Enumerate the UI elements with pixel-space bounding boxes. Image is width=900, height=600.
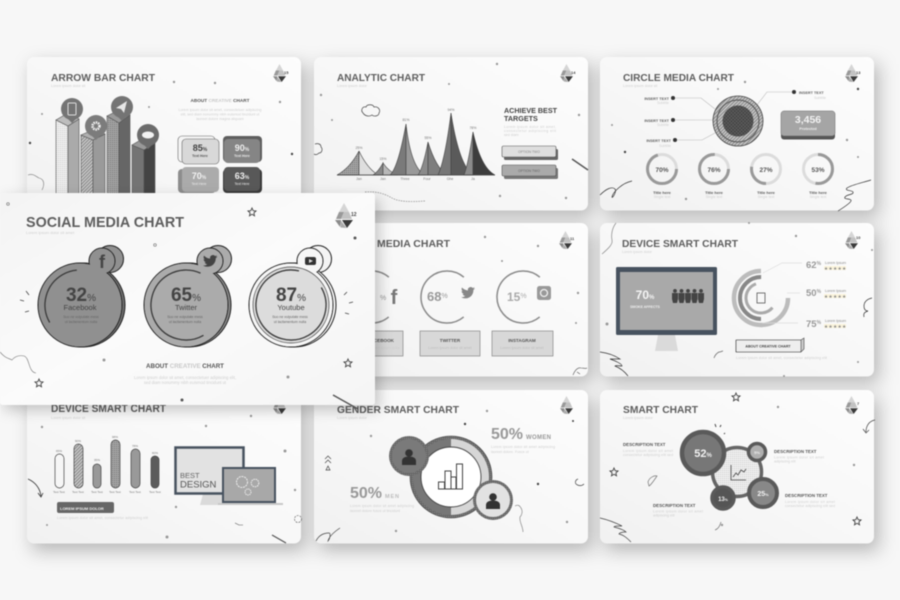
heading: device smart chart: DEVICE SMART CHART <box>51 403 166 415</box>
body text: sed diam <box>504 133 519 137</box>
donut: 76 <box>700 154 728 199</box>
peak labels: Ghe <box>447 177 453 181</box>
heading: media chart: MEDIA CHART <box>377 238 451 250</box>
donut: 53 <box>804 154 832 199</box>
panel: circle media chart <box>600 57 874 211</box>
specks <box>320 63 580 199</box>
label dots and text <box>644 90 826 148</box>
monitor stat: 70% <box>636 288 655 302</box>
panel: device smart chart top <box>600 222 874 377</box>
logo <box>845 396 860 414</box>
specks <box>370 410 574 532</box>
label dots and text: Subtitle <box>659 144 671 148</box>
spark marks <box>20 291 353 314</box>
stat box: 3,456: 3,456 <box>795 114 821 126</box>
specks <box>606 222 873 377</box>
doodles <box>600 420 875 542</box>
bubble 52: 52% <box>694 448 712 460</box>
specks <box>611 81 859 200</box>
stat box 85 <box>178 136 219 164</box>
bubble 13: 13% <box>718 497 729 503</box>
description: upper left <box>623 442 673 457</box>
chart: facebook 32 percent <box>32 246 128 353</box>
stat box 63 <box>223 167 262 193</box>
stat: women <box>491 426 555 454</box>
scribbles <box>600 180 871 211</box>
doughnut ring <box>410 436 492 518</box>
pill bar chart <box>55 440 159 488</box>
subtitle: Lorem ipsum dolor <box>337 84 368 88</box>
description: Suo ne vulputate mess <box>63 315 99 319</box>
panel: social media chart (front card) <box>0 193 375 409</box>
donut: 70: Single text <box>654 195 670 199</box>
card shadows <box>32 64 879 551</box>
stat box 90: Text Here <box>234 154 250 158</box>
panel: social media chart (behind) <box>314 223 588 376</box>
heading: gender smart chart: GENDER SMART CHART <box>337 404 460 416</box>
stat: men: MEN <box>385 494 399 500</box>
button: option two <box>502 146 558 160</box>
stat box: 3,456 <box>781 111 835 140</box>
description: lower right: Lorem ipsum dolor sit amet <box>785 500 835 504</box>
description: lower left: Lorem ipsum dolor sit amet <box>653 510 703 514</box>
panel: arrow bar chart <box>27 57 301 210</box>
label dots and text: Subtitle <box>814 96 826 100</box>
stat: men: laoreet dolore fusce ut tincidunt <box>350 509 400 513</box>
bar labels: Text Text <box>149 490 161 494</box>
specks <box>721 406 855 526</box>
ring: twitter: % <box>441 293 448 300</box>
dashed path doodle <box>365 192 425 202</box>
desktop monitor: BEST <box>180 471 200 480</box>
textured centre circle <box>713 96 763 146</box>
bubble 25: 25% <box>757 491 769 498</box>
stat box 90 <box>223 136 262 163</box>
about ribbon <box>736 338 804 352</box>
stat box 70 <box>178 167 219 193</box>
box: instagram: Lorem ipsum dolor sit amet <box>500 346 544 350</box>
label: Twitter <box>175 303 198 312</box>
desktop monitor <box>176 448 244 505</box>
stat box 70: Text Here <box>192 182 207 186</box>
box: facebook: FACEBOOK <box>368 338 395 343</box>
heading: smart chart: SMART CHART <box>623 404 699 416</box>
box: facebook: Lorem ipsum dolor <box>370 346 401 350</box>
connector lines <box>762 263 802 323</box>
donut: 27: Title here <box>757 190 776 195</box>
doodle <box>28 174 44 190</box>
icon: facebook: f <box>99 252 106 272</box>
doodle <box>573 368 587 375</box>
box: instagram: INSTAGRAM <box>508 338 536 343</box>
peak labels: 94% <box>447 108 455 112</box>
logo <box>273 396 286 414</box>
peak labels: 15% <box>379 157 387 161</box>
bar labels: 90% <box>75 439 81 443</box>
bar labels: Text Text <box>109 490 121 494</box>
icon: bar chart <box>438 464 462 489</box>
stat: men <box>350 485 414 513</box>
panel: device smart chart bottom <box>27 390 302 544</box>
stat rows: ★★★★★ <box>824 294 847 299</box>
subtitle: Lorem ipsum dolor <box>623 416 654 420</box>
laptop <box>218 468 283 505</box>
icon pins <box>61 96 159 149</box>
description <box>63 315 99 324</box>
donut: 70: Title here <box>653 190 672 195</box>
logo <box>560 64 576 82</box>
donut: 70: 70% <box>655 167 669 174</box>
peak labels: 25% <box>355 146 363 150</box>
stat: men: 50% <box>350 485 382 502</box>
icon: line chart <box>731 465 746 480</box>
value: 65% <box>171 285 201 306</box>
panel: smart chart <box>600 390 875 544</box>
stat box 63: Text Here <box>235 182 250 186</box>
logo <box>845 64 861 82</box>
stat: women: Lorem ipsum dolor sit amet adipiscing <box>491 445 555 449</box>
stars <box>610 393 861 525</box>
chart: twitter 65 percent <box>138 246 234 353</box>
description: upper right <box>774 449 824 464</box>
about text: Lorem ipsum dolor sit amet, consectetuer adipiscing elit, <box>134 375 236 380</box>
heading: device smart chart: DEVICE SMART CHART <box>622 238 739 250</box>
description: ut lacfamentum nulla <box>169 320 201 324</box>
about text: Lorem ipsum dolor sit amet, consectetuer adipiscing <box>179 108 261 112</box>
stat rows: ★★★★★ <box>824 266 847 271</box>
bubble small: 5% <box>754 450 760 455</box>
subtitle: Lorem ipsum dolor sit <box>51 84 85 88</box>
peak labels <box>355 108 477 181</box>
logo: 15 <box>284 70 289 75</box>
monitor <box>616 267 717 351</box>
concentric arc chart <box>734 271 788 325</box>
donut: 70 <box>648 154 676 199</box>
description: lower left <box>653 503 703 518</box>
ribbon caption: Lorem ipsum dolor sit amet, consectetur adipiscing elit <box>736 356 827 360</box>
peak labels: 78% <box>469 126 477 130</box>
ribbon caption: Lorem ipsum dolor sit amet, consectetur adipiscing elit <box>57 516 148 520</box>
description: lower right: consectetur adipiscing elit sed <box>785 504 835 508</box>
stat: women: WOMEN <box>526 435 551 441</box>
label dots and text: Subtitle <box>657 123 669 127</box>
logo: 14 <box>571 70 576 75</box>
ring: facebook: % <box>380 295 386 302</box>
button: option two dark: OPTION TWO <box>518 169 540 173</box>
subtitle: Lorem ipsum dolor <box>337 416 368 420</box>
donut: 27: Single text <box>758 195 774 199</box>
bar labels: 65% <box>56 449 62 453</box>
stat rows: % <box>817 320 822 326</box>
description: upper left: Lorem ipsum dolor sit amet <box>623 449 673 453</box>
doodles <box>316 456 584 541</box>
heading: achieve best targets: ACHIEVE BEST <box>504 106 558 115</box>
stat rows: 75 <box>806 319 817 330</box>
subtitle: Lorem ipsum dolor <box>622 250 653 254</box>
peak labels: Three <box>400 177 410 181</box>
label: Facebook <box>64 303 97 312</box>
label dots and text: Subtitle <box>657 101 669 105</box>
doodle: pen <box>333 395 358 409</box>
body text: consectetur adipiscing elit <box>504 129 556 133</box>
label dots and text: INSERT TEXT <box>799 91 824 95</box>
bar labels: Text Text <box>53 490 65 494</box>
description: upper left: consectetur adipiscing elit sed <box>623 453 673 457</box>
area peak chart <box>337 113 495 175</box>
stat rows: % <box>817 261 822 267</box>
ring: instagram: % <box>520 293 527 300</box>
peak labels: 81% <box>402 118 410 122</box>
icon: youtube <box>305 257 316 265</box>
specks <box>29 81 293 155</box>
peak labels: Jan <box>380 177 386 181</box>
value: 87% <box>276 285 306 306</box>
button: option two: OPTION TWO <box>518 150 540 154</box>
peak labels: Ja <box>471 177 475 181</box>
body text: Lorem ipsum dolor sit amet, <box>504 125 556 129</box>
ring: twitter <box>410 260 484 334</box>
description: ut lacfamentum nulla <box>65 320 97 324</box>
ribbon: LOREM IPSUM DOLOR <box>60 506 104 511</box>
description: lower right: DESCRIPTION TEXT <box>785 493 828 498</box>
panel: gender smart chart <box>314 390 588 544</box>
stat rows: Lorem Ipsum <box>825 261 846 265</box>
box: facebook <box>368 331 403 356</box>
logo <box>335 203 357 228</box>
about text: elit, sed diam nonummy nibh euismod tincidunt ut <box>181 112 259 116</box>
stat rows <box>806 260 847 330</box>
heading: circle media chart: CIRCLE MEDIA CHART <box>623 72 735 84</box>
value: 32% <box>66 285 96 306</box>
ring: instagram: 15 <box>507 290 520 304</box>
subtitle: Lorem ipsum dolor sit <box>623 84 657 88</box>
heading: social media chart: SOCIAL MEDIA CHART <box>26 214 184 231</box>
peak labels: 55% <box>424 136 432 140</box>
description: upper right: Lorem ipsum dolor sit amet <box>774 456 824 460</box>
about text <box>134 375 236 385</box>
label dots and text: INSERT TEXT <box>644 119 670 123</box>
label dots and text: INSERT TEXT <box>646 139 672 143</box>
doodle: curl <box>0 352 36 373</box>
logo: 11 <box>570 236 575 241</box>
arrow doodle <box>28 479 43 497</box>
logo: 13 <box>856 70 861 75</box>
logo <box>559 231 575 249</box>
ring: instagram <box>486 260 560 334</box>
box: twitter: TWITTER <box>440 338 461 343</box>
description: upper right: DESCRIPTION TEXT <box>774 449 817 454</box>
stat box: 3,456: Protected <box>799 127 817 131</box>
box: instagram <box>492 331 553 356</box>
description: lower left: DESCRIPTION TEXT <box>653 503 696 508</box>
description: lower left: adipiscing elit <box>653 514 675 518</box>
about heading: ABOUT CREATIVE CHART <box>190 98 250 103</box>
logo: 7 <box>857 401 860 406</box>
heading: achieve best targets <box>504 106 558 123</box>
bar labels <box>53 435 161 494</box>
bar labels: Text Text <box>91 490 103 494</box>
heading: achieve best targets: TARGETS <box>504 114 538 123</box>
ring: twitter: 68 <box>427 289 441 304</box>
bar labels: 78% <box>132 444 138 448</box>
about text <box>179 108 261 121</box>
ribbon <box>57 502 114 513</box>
people icons <box>672 289 704 303</box>
stat box 63: 63% <box>235 171 250 181</box>
stat box 85: Text Here <box>192 154 208 158</box>
stat box 70: 70% <box>192 171 207 181</box>
chart: youtube 87 percent <box>243 246 339 353</box>
bar labels: Text Text <box>72 490 84 494</box>
stat rows: 62 <box>806 260 817 271</box>
ring: facebook <box>335 260 409 334</box>
donut: 76: Single text <box>706 195 722 199</box>
icon: cloud doodle <box>314 105 380 155</box>
stat rows: 50 <box>806 288 817 299</box>
label: Youtube <box>277 303 305 312</box>
stat: women: laoreet dolore. Fusce ut <box>491 450 529 454</box>
box: twitter <box>420 331 480 356</box>
peak labels: Four <box>423 177 431 181</box>
logo: 10 <box>856 235 861 240</box>
logo: 12 <box>351 212 357 218</box>
scribbles <box>600 223 872 376</box>
donut: 27 <box>752 154 780 199</box>
description: lower right <box>785 493 835 508</box>
stat rows: % <box>817 289 822 295</box>
button: option two dark <box>502 165 558 179</box>
stat rows: Lorem Ipsum <box>825 289 846 293</box>
stat box 85: 85% <box>193 143 208 153</box>
monitor stat: SMOKE AFFECTS <box>630 305 661 309</box>
description <box>167 315 203 324</box>
donut: 27: 27% <box>759 167 773 174</box>
box: twitter: Lorem ipsum dolor sit amet <box>428 346 472 350</box>
connector lines <box>673 92 794 140</box>
subtitle: Lorem ipsum dolor sit <box>51 416 85 420</box>
heading: arrow bar chart: ARROW BAR CHART <box>51 72 156 84</box>
pen doodle <box>572 159 588 170</box>
panel: analytic chart <box>314 57 588 210</box>
person: woman <box>473 480 513 520</box>
label dots and text: INSERT TEXT <box>644 97 670 101</box>
description: Suo ne vulputate mess <box>272 315 308 319</box>
stat: men: Lorem ipsum dolor sit amet adipiscing <box>350 504 414 508</box>
bar labels: 35% <box>94 458 100 462</box>
donut: 53: Title here <box>809 190 828 195</box>
donut: 53: Single text <box>810 195 826 199</box>
heading: analytic chart: ANALYTIC CHART <box>337 72 426 84</box>
about text: laoreet dolore magna aliquam <box>196 117 244 121</box>
donut: 53: 53% <box>811 167 825 174</box>
body text <box>504 125 556 137</box>
bar labels: 60% <box>152 451 158 455</box>
logo <box>560 396 573 414</box>
stat rows: ★★★★★ <box>824 324 847 329</box>
peak labels: Jan <box>356 177 362 181</box>
3d bar chart <box>56 110 155 195</box>
stat rows: Lorem Ipsum <box>825 319 846 323</box>
about ribbon: ABOUT CREATIVE CHART <box>745 344 791 348</box>
description: Suo ne vulputate mess <box>167 315 203 319</box>
about text: sed diam nonummy nibh euismod tincidunt ut <box>144 380 227 385</box>
icon: twitter <box>203 255 217 267</box>
stat: women: 50% <box>491 426 523 443</box>
logo <box>845 231 861 249</box>
logo <box>273 64 289 82</box>
donut: 76: Title here <box>705 190 724 195</box>
doodles <box>235 516 302 543</box>
person: man <box>389 436 429 476</box>
donut: 76: 76% <box>707 167 721 174</box>
desktop monitor: DESIGN <box>180 480 217 490</box>
about heading: ABOUT CREATIVE CHART <box>146 363 224 370</box>
bar labels: Text Text <box>129 490 141 494</box>
description: ut lacfamentum nulla <box>274 320 306 324</box>
stat box 90: 90% <box>235 143 250 153</box>
monitor stat <box>630 288 661 309</box>
ring: facebook: f <box>391 287 398 309</box>
description: upper left: DESCRIPTION TEXT <box>623 442 666 447</box>
bubble chart <box>682 432 777 509</box>
specks <box>41 415 296 538</box>
specks <box>484 236 579 324</box>
description: upper right: adipiscing elit <box>774 460 796 464</box>
description <box>272 315 308 324</box>
specks and stars <box>7 203 356 402</box>
subtitle: Lorem ipsum dolor sit amet <box>26 230 75 235</box>
bar labels: 98% <box>112 435 118 439</box>
